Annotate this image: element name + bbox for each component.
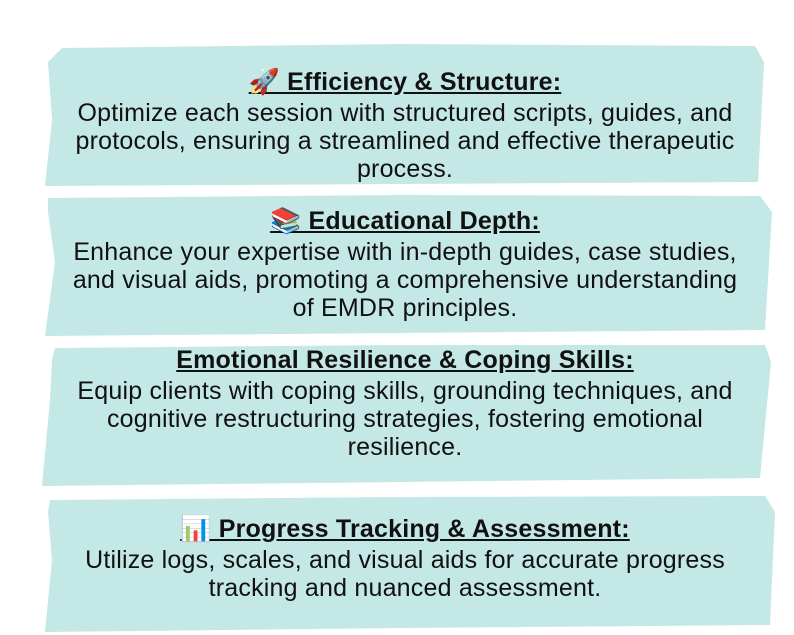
text: Educational Depth — [73, 207, 737, 322]
text: Educational Depth: and visual aids, promoting a comprehensive understanding — [73, 266, 737, 294]
text: Progress Tracking: Utilize logs, scales, and visual aids for accurate progress — [85, 546, 725, 574]
text: Progress Tracking: 📊 Progress Tracking & Assessment: — [180, 515, 630, 543]
text: Efficiency & Structure: Optimize each session with structured scripts, guides, and — [78, 99, 732, 127]
text: Emotional Resilience: Emotional Resilience & Coping Skills: — [176, 346, 634, 374]
text: Emotional Resilience — [77, 346, 733, 461]
text: Emotional Resilience: cognitive restructuring strategies, fostering emotional — [107, 405, 703, 433]
panel 3 shape — [42, 345, 771, 486]
panel 1 shape — [45, 44, 764, 186]
text: Efficiency & Structure: process. — [357, 155, 453, 183]
text: Efficiency & Structure: 🚀 Efficiency & Structure: — [249, 68, 561, 96]
text: Efficiency & Structure — [76, 68, 734, 183]
text: Emotional Resilience: resilience. — [348, 433, 462, 461]
text: Educational Depth: 📚 Educational Depth: — [270, 207, 540, 235]
panel 4 shape — [45, 496, 775, 632]
text: Emotional Resilience: Equip clients with coping skills, grounding techniques, and — [77, 377, 733, 405]
text: Efficiency & Structure: protocols, ensuring a streamlined and effective therapeutic — [76, 127, 734, 155]
text: Progress Tracking: tracking and nuanced assessment. — [209, 574, 601, 602]
panel 2 shape — [45, 195, 772, 336]
text: Educational Depth: of EMDR principles. — [293, 294, 517, 322]
text: Progress Tracking — [85, 514, 725, 602]
text: Educational Depth: Enhance your expertise with in-depth guides, case studies, — [73, 238, 737, 266]
